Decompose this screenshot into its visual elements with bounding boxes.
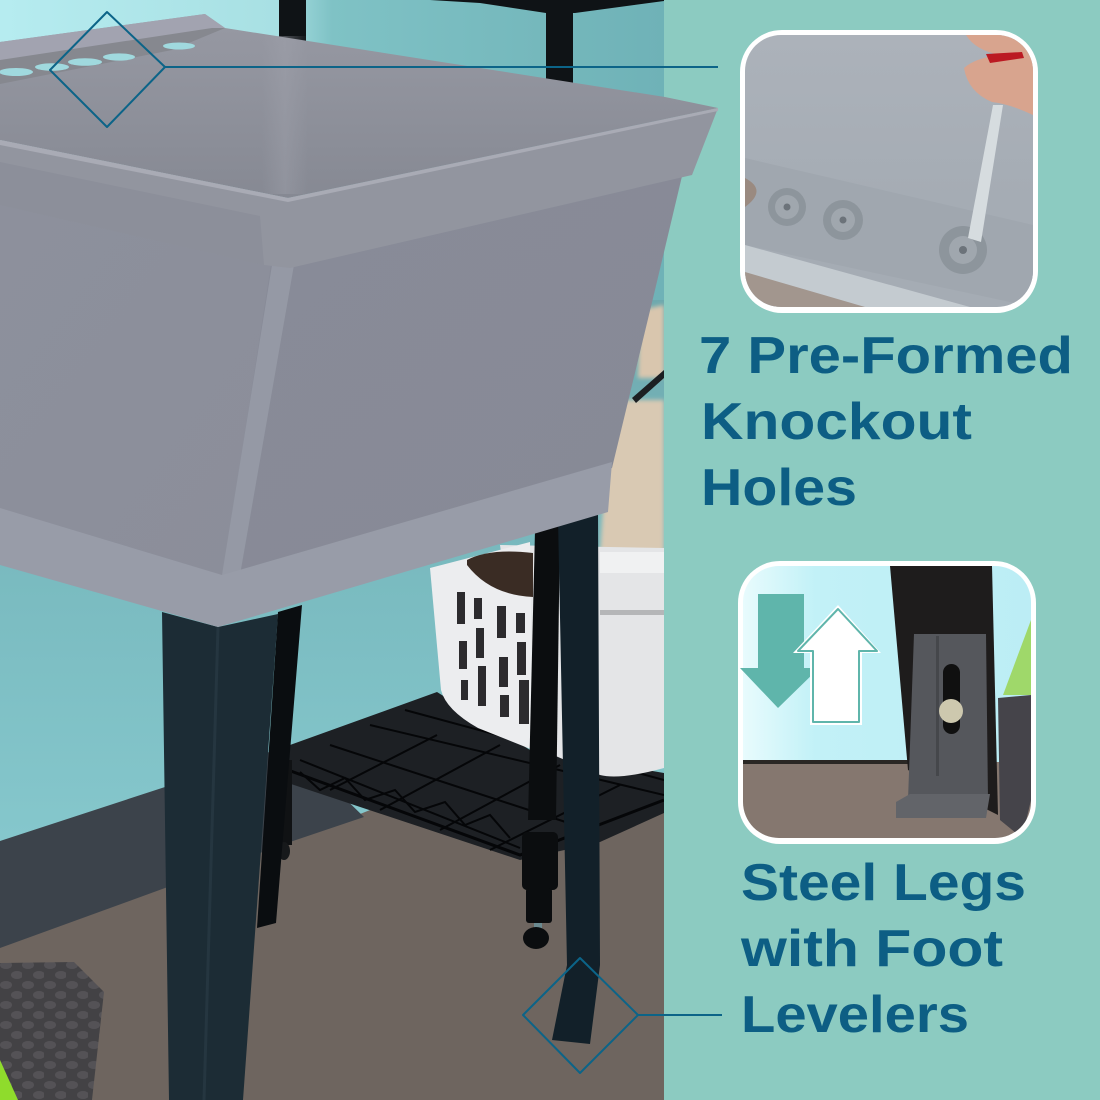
- leveler bracket: [896, 634, 990, 818]
- heading: 7 Pre-Formed Knockout Holes: [699, 327, 1073, 517]
- product photo: laundry room scene: [0, 0, 664, 1100]
- heading: 7 Pre-Formed Knockout Holes: 7 Pre-Formed: [699, 327, 1073, 385]
- interior: [0, 14, 718, 198]
- front leg: [162, 612, 278, 1100]
- sink: basin and rim: [0, 14, 718, 627]
- screwdriver: [968, 105, 1003, 242]
- icon: up arrow: [793, 605, 881, 725]
- rim: [0, 108, 718, 268]
- heading: Steel Legs with Foot Levelers: Steel Legs: [741, 854, 1026, 912]
- shelf pole and foot leveler: [522, 525, 560, 949]
- front right face: [222, 172, 683, 580]
- knockout 3: [939, 226, 987, 274]
- bucket: [500, 545, 664, 776]
- floor: [0, 790, 664, 1100]
- upper shelf edge behind towels: [632, 370, 664, 403]
- corner highlight: [222, 265, 294, 575]
- back left leg: [257, 605, 302, 928]
- heading: 7 Pre-Formed Knockout Holes: Knockout: [701, 393, 972, 451]
- callout: foot leveler marker: [523, 958, 722, 1073]
- heading: 7 Pre-Formed Knockout Holes: Holes: [701, 459, 857, 517]
- knockout 1: [768, 188, 806, 226]
- laundry basket: [430, 542, 533, 750]
- towels: [600, 400, 664, 555]
- bottom band: [0, 462, 612, 627]
- wall: [0, 0, 664, 300]
- inset photo: knockout holes: [740, 30, 1038, 313]
- back rim: [0, 14, 225, 66]
- wire shelf: [278, 692, 664, 860]
- knockout 2: [823, 200, 863, 240]
- callout: knockout holes marker: [50, 12, 718, 127]
- heading: Steel Legs with Foot Levelers: [740, 854, 1026, 1044]
- shelf post top and rack: [279, 0, 664, 84]
- right leg: [552, 510, 600, 1044]
- baseboard: [0, 745, 364, 948]
- front left face: [0, 200, 280, 580]
- heading: Steel Legs with Foot Levelers: with Foot: [740, 920, 1003, 978]
- knockout holes: [0, 42, 195, 76]
- microfiber mop: [0, 962, 104, 1100]
- icon: down arrow: [740, 594, 819, 708]
- interior crease: [262, 36, 308, 194]
- hole band: [0, 28, 225, 84]
- hand: [964, 35, 1033, 115]
- heading: Steel Legs with Foot Levelers: Levelers: [741, 986, 969, 1044]
- inset photo: foot leveler: [738, 561, 1036, 844]
- screwdriver handle: [986, 52, 1024, 63]
